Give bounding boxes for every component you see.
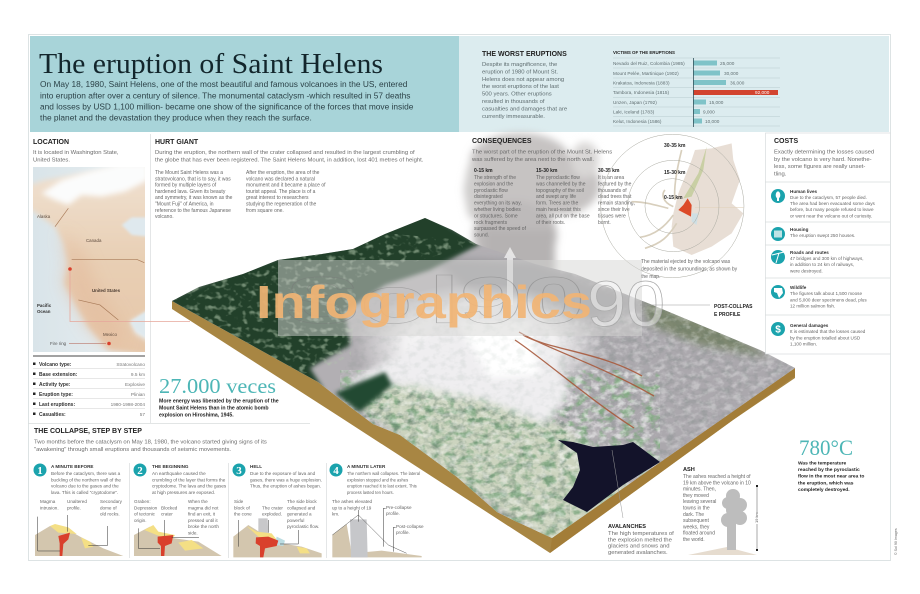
callout: 780°C: 780°C [799,435,853,460]
step 3: The side block [287,499,317,504]
blast zone map: 0-15 km [664,195,683,201]
eruption plume [464,133,600,275]
callout: 27,000 veces [159,374,279,418]
bar chart: victims of the eruptions: Nevado del Ruiz, Colombia (1985) [613,61,685,66]
collapse intro: "awakening" through small eruptions and thousands of seismic movements. [34,447,231,453]
panel: worst eruptions [459,36,889,132]
bar chart: victims of the eruptions: Unzen, Japan (1792) [613,100,657,105]
zone 30-35 km: burnt. [598,220,611,226]
cost: wildlife: Wildlife [790,285,807,290]
diagram: beginning [134,520,222,556]
bar chart: victims of the eruptions: Kelut, Indonesia (1586) [613,119,662,124]
heading: CONSEQUENCES [472,138,532,145]
icon: house [771,227,785,241]
mottled texture [340,370,660,550]
zone 15-30 km: area, all put on the base [536,213,590,219]
panel: header [30,36,459,132]
callout: ash: dark. The [683,512,704,518]
worst eruptions text: Helens does not appear among [482,77,564,83]
icon: animal [771,285,785,299]
step 1: intrusion. [40,505,59,510]
step 2: at high pressures are exposed. [152,490,215,495]
volcano data table: Activity type: [39,382,71,388]
step 2: broke the north [188,524,219,529]
heading: COSTS [774,138,798,145]
step 3: collapsed and [287,505,316,510]
step 1: buckling of the northern wall of the [51,477,121,482]
zone 30-35 km [598,168,635,226]
heading: LOCATION [33,139,69,146]
zone 0-15 km: whether living bodies [474,207,521,213]
callout: 780°C: reached by the pyroclastic [798,467,860,473]
zone 30-35 km: dead trees that [598,194,632,200]
worst eruptions text: 500 years. Other eruptions [482,92,552,98]
cost: general damages: by the eruption totalled about USD [790,335,861,340]
callout: 780°C: the eruption, which was [798,480,854,486]
hurt giant column 1: volcano. [155,214,174,220]
back slope of the volcano [443,258,640,318]
blast zone map: 30-35 km [664,143,686,149]
zone 0-15 km: or structures. Some [474,213,518,219]
hurt giant intro: the globe that has ever been registered. The Saint Helens Mount, in addition, lost 401 metres of height. [155,158,424,164]
zone 15-30 km: and swept any life [536,194,576,200]
zone 15-30 km [536,168,590,226]
blast zone map [601,134,744,278]
bar chart: victims of the eruptions: 15,000 [709,100,724,105]
hurt giant column 2: great interest to researchers [246,195,309,201]
step 1: Unaltered [67,499,87,504]
step 4: km. [332,512,339,517]
step 2: cryptodome. The lava and the gases [152,484,227,489]
step 1: profile. [67,505,81,510]
step 2: pressed until it [188,518,218,523]
step 2: Blocked [161,505,178,510]
zone 30-35 km: since their live [598,207,630,213]
volcano data table: 1980-1998-2004 [111,402,145,407]
cost: general damages: 1,100 million. [790,342,817,347]
locator map [25,163,152,357]
step 2: Graben: [134,499,151,504]
hurt giant column 2: volcano was declared a natural [246,176,315,182]
step 4: A MINUTE LATER [347,464,386,469]
zone 30-35 km: It is an area [598,175,624,181]
costs intro: tling. [774,172,787,178]
step 1: Magma [40,499,56,504]
watermark: 90 [587,268,665,340]
collapse intro: Two months before the cataclysm on May 18, 1980, the volcano started giving signs of its [34,440,267,446]
icon: ash cloud: 19 km [754,511,759,523]
step 2 [134,464,227,556]
image credit: © Sol 90 Images [894,528,898,555]
step 1: A MINUTE BEFORE [51,464,93,469]
callout: ash: The ashes reached a height of [683,474,751,480]
step 4 [330,464,424,557]
step 3: Due to the exposure of lava and [250,471,316,476]
watermark: Sol90 [285,263,585,337]
volcano data table: Casualties: [39,412,66,418]
terrain base sides [172,301,795,553]
cost: human lives: before, but many people refused to leave [790,207,874,212]
watermark [256,260,665,340]
bar chart: victims of the eruptions: 9,000 [703,110,715,114]
step 4: The northern wall collapses. The lateral [347,471,420,476]
cost: human lives: or went near the volcano out of curiosity. [790,213,872,218]
volcano data table: Volcano type: [39,362,72,368]
locator map: Fire ring [50,341,67,346]
zone 15-30 km: was channelled by the [536,181,586,187]
pale lower valley [362,384,626,538]
callout: avalanches: The high temperatures of [608,531,674,537]
step 4: The ashes elevated [332,499,373,504]
callout: ash: they moved [683,493,709,499]
step 3: pyroclastic flow. [287,524,319,529]
step 2: side. [188,530,198,536]
title: The eruption of Saint Helens [39,49,383,80]
zone 30-35 km: 30-35 km [598,168,620,174]
bar chart: victims of the eruptions [613,50,780,127]
cost: wildlife: and 5,000 deer specimens dead, plus [790,297,867,302]
callout: 780°C [798,435,864,493]
step 1: Before the cataclysm, there was a [51,471,121,476]
heading: THE COLLAPSE, STEP BY STEP [34,428,142,435]
step 1: 1 [37,465,43,477]
step 4: eruption reached it to last extent. This [347,484,417,489]
callout: 27,000 veces: Mount Saint Helens than in the atomic bomb [159,406,269,412]
step 3: exploded. [262,512,282,517]
step 4: Post-collapse [396,524,424,529]
volcano data table: 9.5 km [131,372,145,377]
step 2: Depression [134,505,158,510]
cost: human lives: Human lives [790,189,818,194]
worst eruptions text: casualties and damages that are [482,106,568,112]
hurt giant column 2: monument and it became a place of [246,183,326,189]
3D terrain of Mount Saint Helens [165,210,805,553]
icon: person [771,189,785,203]
hurt giant column 2: from square one. [246,208,284,214]
cost: roads and routes: in addition to 24 km of railways, [790,262,854,267]
step 3 [232,464,322,557]
cost: general damages [771,322,866,347]
callout: avalanches: generated avalanches. [608,550,668,556]
zone 15-30 km: 15-30 km [536,168,558,174]
volcano data table: Explosive [125,382,145,387]
step 4: process lasted ten hours. [347,490,394,495]
zone 30-35 km: remain standing, [598,201,635,207]
zone 0-15 km: explosion and the [474,181,513,187]
bar chart: victims of the eruptions: 36,000 [730,80,745,86]
callout: ash: weeks, they [683,524,710,530]
cost: human lives: The area had been evacuated some days [790,201,875,206]
cost: housing: Housing [790,227,809,232]
callout: 27,000 veces: 27.000 veces [159,374,276,398]
panel: location [25,139,190,418]
step 2: crumbling of the layer that forms the [152,477,226,482]
zone 30-35 km: thousands of [598,188,627,194]
volcano data table: Stratovolcano [116,362,145,367]
zone 0-15 km: 0-15 km [474,168,493,174]
step 1: old rocks. [100,512,120,517]
hurt giant column 2: studying the regeneration of the [246,202,317,208]
step 4: Pre-collapse [386,505,412,510]
intro paragraph: the planet and the devastation they produce when they reach the surface. [40,113,312,123]
panel: consequences [471,134,744,280]
step 3: generated a [287,512,312,517]
zone 15-30 km: main heat-resist this [536,207,581,213]
callout: 780°C: flow in the most near area to [798,474,864,480]
step 2: crater [161,512,173,517]
step 3: HELL [250,464,262,469]
callout: ash: minutes. Then, [683,487,716,493]
lake [558,440,660,512]
callout: 780°C: Was the temperature [798,460,846,466]
locator map: Canada [86,238,102,243]
locator map: Alaska [37,214,51,219]
step 3: The crater [262,505,283,510]
location line to terrain [70,270,190,322]
column divider lines [28,134,310,424]
locator map: United States [92,288,121,293]
diagram: later [332,508,422,557]
step 4: explosion stopped and the ashes [347,477,408,482]
hurt giant column 1: stratovolcano, that is to say, it was [155,176,231,182]
step 4: 4 [333,465,339,477]
cost: roads and routes: 47 bridges and 300 km of highways, [790,256,864,261]
volcano data table [33,356,145,418]
cost: roads and routes: Roads and routes [790,250,829,255]
cost: human lives [771,189,875,218]
bar chart: victims of the eruptions: 25,000 [720,61,735,66]
step 3: Thus, the eruption of ashes began. [250,484,321,489]
volcano data table: Eruption type: [39,392,73,398]
zone 0-15 km: everything on its way, [474,201,522,207]
callout: ash [683,467,761,555]
lava flows [515,332,654,428]
costs intro: by the volcano is very hard. Nonethe- [774,157,872,163]
cost: roads and routes [771,250,864,273]
worst eruptions text: the worst eruptions of the last [482,84,559,90]
bar chart: victims of the eruptions: 92,000 [755,90,770,95]
step 1 [34,464,123,556]
label: post-collapse profile: POST-COLLPAS [714,304,753,310]
bar chart: victims of the eruptions: Tambora, Indonesia (1815) [613,90,669,95]
callout: ash: 19 km above the volcano in 10 [683,480,751,486]
step 3: the cone [234,512,252,517]
step 2: find an exit, it [188,512,216,517]
locator map: Mexico [103,332,117,337]
step 3: powerful [287,518,304,523]
hurt giant column 2: After the eruption, the area of the [246,170,320,176]
zone 0-15 km: sound. [474,233,489,239]
callout: ash: towns in the [683,506,710,512]
step 2: 2 [137,465,143,477]
step 2: magma did not [188,505,219,510]
cost: housing [771,227,855,241]
step 1: volcano due to the gases and the [51,484,119,489]
intro paragraph: and losses by USD 1,100 million- became one show of the significance of the forces that move inside [40,102,414,112]
diagram: hell [233,518,322,557]
location text: United States. [33,158,70,164]
callout: avalanches: AVALANCHES [608,524,646,530]
locator map: Pacific [37,303,52,308]
locator map: Ocean [37,309,51,314]
panel: the collapse, step by step [34,428,424,558]
step 3: 3 [236,465,242,477]
watermark: Infographics [256,276,592,328]
map caption: deposited in the surroundings, as shown by [641,266,738,272]
zone 0-15 km: The strength of the [474,175,516,181]
step 4: up to a height of 19 [332,505,372,510]
cost: housing: The eruption swept 250 houses. [790,233,855,238]
callout: ash: ASH [683,467,695,473]
callout: ash: subsequent [683,518,709,524]
heading: HURT GIANT [155,139,199,146]
zone 15-30 km: form. Trees are the [536,201,578,207]
blast zone map: 15-30 km [664,170,686,176]
bar chart: victims of the eruptions: Krakatoa, Indonesia (1883) [613,80,670,86]
bar chart: victims of the eruptions: 30,000 [724,71,739,76]
hurt giant intro: During the eruption, the northern wall of the crater collapsed and resulted in the largest crumbling of [155,150,415,156]
mount location dot [68,267,72,271]
step 3: gases, there was a huge explosion. [250,477,322,482]
callout: 27,000 veces: explosion on Hiroshima, 1945. [159,412,234,418]
callout: 780°C: completely destroyed. [798,487,850,493]
zone 15-30 km: of their roots. [536,220,565,226]
cost: wildlife: The figures talk about 1,500 moose [790,291,862,296]
cost: general damages: General damages [790,323,829,328]
bar chart: victims of the eruptions: 10,000 [705,119,720,124]
location text: It is located in Washington State, [33,150,119,156]
cost: wildlife [771,285,867,309]
snow cone [362,288,600,404]
panel: costs [765,133,890,354]
step 1: dome of [100,505,117,510]
label: post-collapse profile [640,304,753,318]
step 3: block of [234,505,251,510]
intro paragraph: On May 18, 1980, Saint Helens, one of the most beautiful and famous volcanoes in the US, entered [40,79,408,89]
grey plain [643,301,795,462]
zone 0-15 km: disintegrated [474,194,503,200]
zone 0-15 km: rock fragments [474,220,508,226]
bar chart: victims of the eruptions: VICTIMS OF THE ERUPTIONS [613,50,675,55]
hurt giant column 1: "Mount Fuji" of America, in [155,202,214,208]
cost: wildlife: 12 million salmon fish. [790,304,835,309]
worst eruptions text: eruption of 1980 of Mount St. [482,69,558,75]
callout: 27,000 veces: More energy was liberated by the eruption of the [159,398,279,404]
costs intro: less, some figures are really unset- [774,164,865,170]
zone 0-15 km: surpassed the speed of [474,226,527,232]
arrow: plume direction [504,247,516,305]
icon: road [771,250,785,264]
consequences intro: was suffered by the area next to the north wall. [471,157,594,163]
zone 0-15 km: pyroclastic flow [474,188,508,194]
bar chart: victims of the eruptions: Mount Pelée, Martinique (1902) [613,71,679,76]
step 1: Secondary [100,499,123,504]
hurt giant column 1: formed by multiple layers of [155,183,217,189]
zone 30-35 km: tissues were [598,213,626,219]
heading: THE WORST ERUPTIONS [482,51,567,58]
costs intro: Exactly determining the losses caused [774,150,874,156]
volcano data table: Last eruptions: [39,402,75,408]
icon: dollar: $ [775,324,781,336]
callout: avalanches: the explosion melted the [608,537,673,543]
callout: ash: the world. [683,537,705,543]
step 3: Side [234,499,244,504]
step 2: When the [188,499,208,504]
intro paragraph: into eruption after over a century of silence. The monumental cataclysm -which resulted in 57 deaths [40,90,410,100]
step 2: of tectonic [134,512,156,517]
cost: roads and routes: were destroyed. [790,268,823,273]
volcano data table: 57 [140,412,145,417]
cost: human lives: Due to the cataclysm, 57 people died. [790,195,867,200]
callout: avalanches [608,450,674,556]
cost: general damages: It is estimated that the losses caused [790,329,866,334]
consequences intro: The worst part of the eruption of the Mount St. Helens [472,150,612,156]
map caption: The material ejected by the volcano was [641,259,731,265]
step 2: origin. [134,518,147,523]
callout: avalanches: glaciers and snows and [608,544,670,550]
terrain surface [165,210,805,550]
volcano data table: Plinian [131,392,145,397]
hurt giant column 1: The Mount Saint Helens was a [155,170,223,176]
callout: ash: floated around [683,531,715,537]
zone 0-15 km [474,168,527,239]
step 1: lava. This is called "cryptodome". [51,490,118,495]
label: post-collapse profile: E PROFILE [714,312,741,318]
step 4: profile. [386,511,400,516]
zone 15-30 km: The pyroclastic flow [536,175,580,181]
diagram: before [35,515,123,556]
worst eruptions text: Despite its magnificence, the [482,62,558,68]
hurt giant column 1: reference to the famous Japanese [155,208,231,214]
dark forest [165,212,480,390]
step 4: profile. [396,530,410,535]
bar chart: victims of the eruptions: Laki, Iceland (1783) [613,110,655,114]
zone 15-30 km: topography of the soil [536,188,584,194]
step 2: An earthquake caused the [152,471,206,476]
hurt giant column 2: tourist appeal. The place is of a [246,189,316,195]
step 2: THE BEGINNING [152,464,189,469]
panel: hurt giant [155,139,424,220]
hurt giant column 1: hardened lava. Given its beauty [155,189,226,195]
worst eruptions text: resulted in thousands of [482,99,545,105]
callout: ash: leaving several [683,499,716,505]
worst eruptions text: currently immeasurable. [482,114,545,120]
hurt giant column 1: and symmetry, it was known as the [155,195,233,201]
map caption: the map. [641,274,660,280]
volcano data table: Base extension: [39,372,78,378]
zone 30-35 km: featured by the [598,181,632,187]
